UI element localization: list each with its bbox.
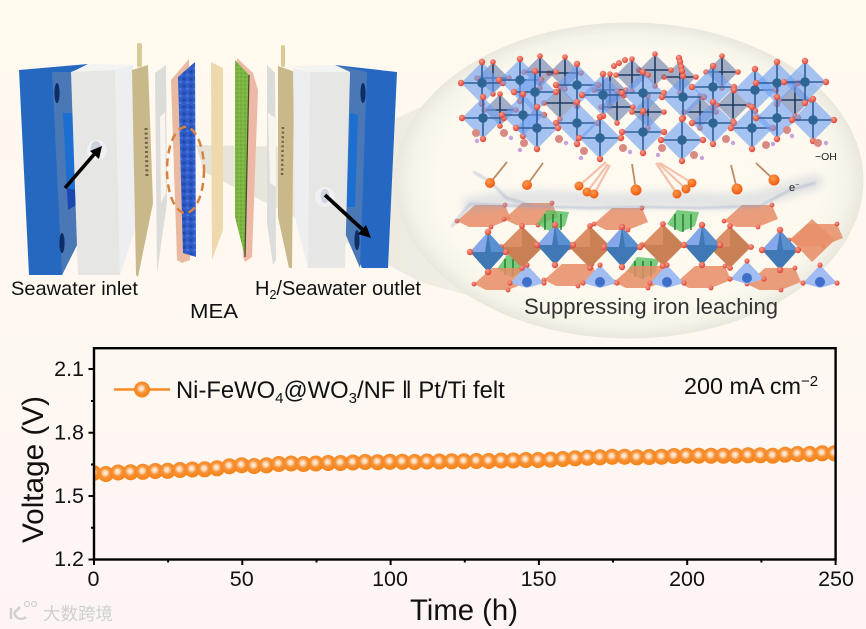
crystal: upper WO3 layer xyxy=(458,51,837,164)
x axis tick labels: 150 xyxy=(521,567,556,591)
MEA membrane and blue anode foam xyxy=(171,59,196,263)
electron discharge wisps xyxy=(452,172,815,226)
watermark: 大数跨境 xyxy=(43,604,113,624)
legend: 3 xyxy=(349,390,357,407)
callout bubble: magnified catalyst view xyxy=(196,22,864,338)
legend xyxy=(114,377,505,407)
arrow: seawater in xyxy=(65,146,102,188)
dashed highlight on MEA xyxy=(167,127,204,213)
current density note: 200 mA cm xyxy=(684,373,801,399)
electrons moving toward the lower layer xyxy=(485,162,780,198)
legend: /NF ‖ Pt/Ti felt xyxy=(357,377,505,404)
x axis tick labels xyxy=(88,567,854,591)
y axis tick labels: 1.2 xyxy=(54,547,84,571)
left gold current collector xyxy=(132,43,153,277)
electrolyzer exploded assembly xyxy=(19,43,397,277)
right gold current collector xyxy=(278,45,295,268)
chart: voltage versus time xyxy=(17,348,854,627)
label: H2/seawater outlet: H xyxy=(255,278,269,300)
current density note: −2 xyxy=(801,373,818,390)
hydroxide ions xyxy=(472,126,828,160)
watermark xyxy=(11,602,113,624)
label: H2/seawater outlet: 2 xyxy=(269,288,276,302)
right blue end plate xyxy=(335,65,397,268)
label: H2/seawater outlet: /Seawater outlet xyxy=(276,278,421,300)
y axis tick labels: 1.8 xyxy=(54,420,84,444)
label: seawater inlet: Seawater inlet xyxy=(11,278,139,300)
x axis tick labels: 250 xyxy=(818,567,854,591)
x axis tick labels: 50 xyxy=(230,567,254,591)
plot frame and ticks xyxy=(88,348,836,565)
caption: suppressing iron leaching: Suppressing iron leaching xyxy=(524,294,778,319)
label: electron: − xyxy=(795,182,799,189)
x axis title: Time (h) xyxy=(410,594,518,627)
x axis tick labels: 0 xyxy=(88,567,100,591)
data series xyxy=(86,445,842,482)
y axis title: Voltage (V) xyxy=(17,396,50,543)
label: hydroxide: −OH xyxy=(815,151,837,163)
MEA pink membrane and green cathode xyxy=(235,58,258,262)
MEA centre beige layer xyxy=(211,62,223,260)
left grey gasket xyxy=(155,65,167,273)
legend: Ni-FeWO xyxy=(176,377,275,404)
legend: 4 xyxy=(275,390,283,407)
x axis tick labels: 100 xyxy=(372,567,408,591)
right white flow block xyxy=(293,65,350,268)
arrow: gas and seawater out xyxy=(325,195,371,238)
y axis tick labels: 2.1 xyxy=(54,357,84,381)
x axis tick labels: 200 xyxy=(669,567,705,591)
y axis tick labels: 1.5 xyxy=(54,484,84,508)
y axis tick labels xyxy=(54,357,84,571)
left white flow block xyxy=(71,64,135,275)
label: MEA: MEA xyxy=(190,301,239,323)
left blue end plate xyxy=(19,64,88,275)
crystal: lower Ni-FeWO4 layer xyxy=(455,201,843,292)
right grey gasket xyxy=(267,65,276,265)
legend: @WO xyxy=(283,377,349,404)
label: electron: e xyxy=(789,182,795,194)
